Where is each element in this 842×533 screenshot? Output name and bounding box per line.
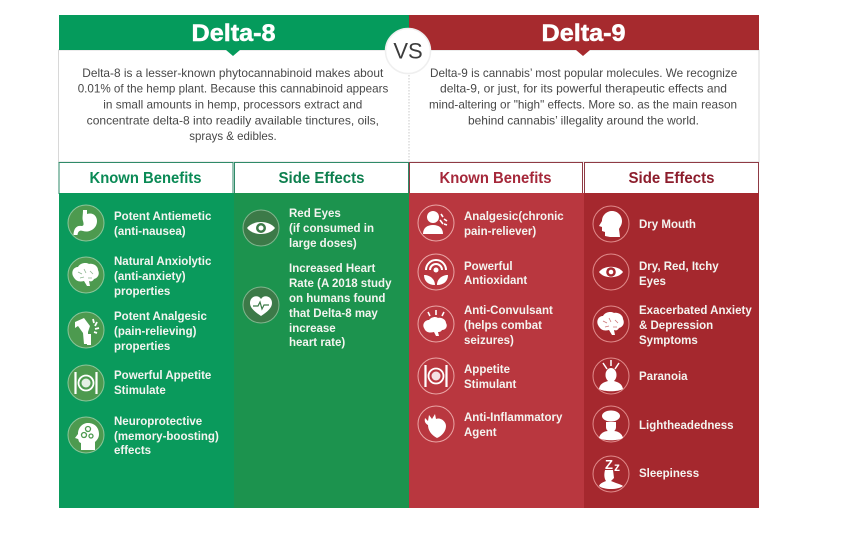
icon: stomach xyxy=(68,205,104,241)
icon: brain xyxy=(593,306,629,342)
panel heading: Side Effects (red): Side Effects xyxy=(628,170,714,187)
text: Potent Analgesic: (pain-relieving) xyxy=(114,326,197,338)
text: Neuroprotective: effects xyxy=(114,445,151,457)
text: Red Eyes: large doses) xyxy=(289,238,357,250)
text: Neuroprotective xyxy=(114,416,219,457)
text: Powerful Appetite xyxy=(114,370,211,397)
panel heading: Side Effects (green): Side Effects xyxy=(278,170,364,187)
icon: head profile xyxy=(593,206,629,242)
text: Exacerbated Anxiety: Exacerbated Anxiety xyxy=(639,305,752,317)
icon: anatomical heart xyxy=(418,406,454,442)
text: Anti-Inflammatory Agent: Anti-Inflammatory xyxy=(464,412,563,424)
panel heading: Known Benefits (red): Known Benefits xyxy=(440,170,552,187)
text block: Delta-9 description: behind cannabis’ illegality around the world. xyxy=(468,114,699,128)
icon: knee joint xyxy=(68,312,104,348)
text: Potent Antiemetic: (anti-nausea) xyxy=(114,226,186,238)
text: Powerful Appetite: Powerful Appetite xyxy=(114,370,211,382)
text: Potent Antiemetic: Potent Antiemetic xyxy=(114,211,212,223)
icon: sleepy head: z xyxy=(614,460,620,474)
panel heading: Known Benefits (red) xyxy=(410,162,582,194)
text: Anti-Inflammatory Agent xyxy=(464,412,563,439)
panel: Delta-9 known benefits xyxy=(409,162,584,508)
text: Neuroprotective: (memory-boosting) xyxy=(114,431,219,443)
text: Analgesic: Analgesic(chronic xyxy=(464,211,564,223)
panel: Delta-8 known benefits xyxy=(59,162,234,508)
icon: sleepy head: Z xyxy=(605,457,613,472)
text: Appetite Stimulant xyxy=(464,364,517,391)
text: Anti-Convulsant: Anti-Convulsant xyxy=(464,305,553,317)
header: Delta-9: Delta-9 xyxy=(542,20,626,47)
text block: Delta-9 description: Delta-9 is cannabis’ most popular molecules. We recognize xyxy=(430,66,738,80)
text: Natural Anxiolytic: Natural Anxiolytic xyxy=(114,256,212,268)
text: Appetite Stimulant: Stimulant xyxy=(464,379,517,391)
icon: brain xyxy=(68,257,104,293)
header: Delta-8 xyxy=(59,15,409,56)
text: Increased Heart Rate: on humans found xyxy=(289,293,385,305)
text: Dry Mouth: Dry Mouth xyxy=(639,219,696,231)
text block: Delta-9 description: delta-9, or just, for its powerful therapeutic effects and xyxy=(440,82,727,96)
text block: Delta-8 description: sprays & edibles. xyxy=(189,129,277,143)
panel heading: Side Effects (red) xyxy=(584,162,758,194)
text block: Delta-8 description xyxy=(78,66,388,143)
text: Analgesic: pain-reliever) xyxy=(464,226,536,238)
header: Delta-9 xyxy=(409,15,759,56)
text: Potent Analgesic: Potent Analgesic xyxy=(114,311,207,323)
text: Natural Anxiolytic: (anti-anxiety) xyxy=(114,271,186,283)
panel: Delta-9 side effects xyxy=(584,162,759,508)
text: Anti-Convulsant: seizures) xyxy=(464,335,514,347)
text: Dry, Red, Itchy Eyes xyxy=(639,261,719,288)
panel heading: Known Benefits (green) xyxy=(59,162,233,194)
text: Potent Analgesic: properties xyxy=(114,341,170,353)
text: Analgesic xyxy=(464,211,564,238)
text block: Delta-9 description xyxy=(429,66,738,128)
text: Lightheadedness: Lightheadedness xyxy=(639,420,734,432)
icon: lightheaded head xyxy=(593,406,629,442)
text block: Delta-8 description: 0.01% of the hemp plant. Because this cannabinoid appears xyxy=(78,82,388,96)
icon: brain with sparks xyxy=(418,306,454,342)
text: Increased Heart Rate: Increased Heart xyxy=(289,263,375,275)
icon: plate and cutlery xyxy=(68,365,104,401)
text: Increased Heart Rate: Rate (A 2018 study xyxy=(289,278,392,290)
text: Anti-Convulsant: (helps combat xyxy=(464,320,542,332)
text: Dry, Red, Itchy Eyes: Eyes xyxy=(639,276,666,288)
text: Increased Heart Rate: heart rate) xyxy=(289,337,345,349)
text: Increased Heart Rate: that Delta-8 may xyxy=(289,308,378,320)
text: Natural Anxiolytic xyxy=(114,256,212,298)
text: Neuroprotective: Neuroprotective xyxy=(114,416,202,428)
text: Exacerbated Anxiety: & Depression xyxy=(639,320,713,332)
icon: plate and cutlery xyxy=(418,358,454,394)
text: Potent Analgesic xyxy=(114,311,207,353)
text: Appetite Stimulant: Appetite xyxy=(464,364,510,376)
icon: paranoia head xyxy=(593,358,629,394)
panel heading: Side Effects (green) xyxy=(234,162,408,194)
text: Red Eyes xyxy=(289,208,374,250)
text: Anti-Convulsant xyxy=(464,305,553,347)
text: Dry, Red, Itchy Eyes: Dry, Red, Itchy xyxy=(639,261,719,273)
text: Exacerbated Anxiety xyxy=(639,305,752,347)
panel heading: Known Benefits (green): Known Benefits xyxy=(90,170,202,187)
text: Red Eyes: Red Eyes xyxy=(289,208,341,220)
text: Potent Antiemetic xyxy=(114,211,212,238)
text: Red Eyes: (if consumed in xyxy=(289,223,374,235)
icon: person in pain xyxy=(418,205,454,241)
text: Natural Anxiolytic: properties xyxy=(114,286,170,298)
text: Powerful Antioxidant xyxy=(464,261,527,287)
text block: Delta-8 description: in small amounts in hemp, processors extract and xyxy=(103,98,362,112)
icon: sleepy head xyxy=(593,456,629,492)
icon: head with gears xyxy=(68,417,104,453)
panel: Delta-8 side effects xyxy=(234,162,409,508)
text: Sleepiness: Sleepiness xyxy=(639,468,699,480)
icon: heart with pulse xyxy=(243,287,279,323)
VS badge xyxy=(386,28,430,74)
text block: Delta-9 description: mind-altering or "high" effects. More so. as the main reason xyxy=(429,98,737,112)
icon: eye xyxy=(243,210,279,246)
text block: Delta-8 description: Delta-8 is a lesser-known phytocannabinoid makes about xyxy=(82,66,384,80)
text: Paranoia: Paranoia xyxy=(639,371,688,383)
text: Increased Heart Rate: increase xyxy=(289,323,336,335)
text: Powerful Antioxidant: Antioxidant xyxy=(464,275,527,287)
header: Delta-8: Delta-8 xyxy=(192,20,276,47)
text: Exacerbated Anxiety: Symptoms xyxy=(639,335,698,347)
text: Powerful Antioxidant: Powerful xyxy=(464,261,513,273)
text block: Delta-8 description: concentrate delta-8 into readily available tinctures, oils, xyxy=(87,114,379,128)
icon: antioxidant xyxy=(418,254,454,290)
text: Increased Heart Rate xyxy=(289,263,392,349)
text: Anti-Inflammatory Agent: Agent xyxy=(464,427,497,439)
text: Powerful Appetite: Stimulate xyxy=(114,385,166,397)
icon: eye xyxy=(593,254,629,290)
VS badge: VS xyxy=(393,38,423,64)
